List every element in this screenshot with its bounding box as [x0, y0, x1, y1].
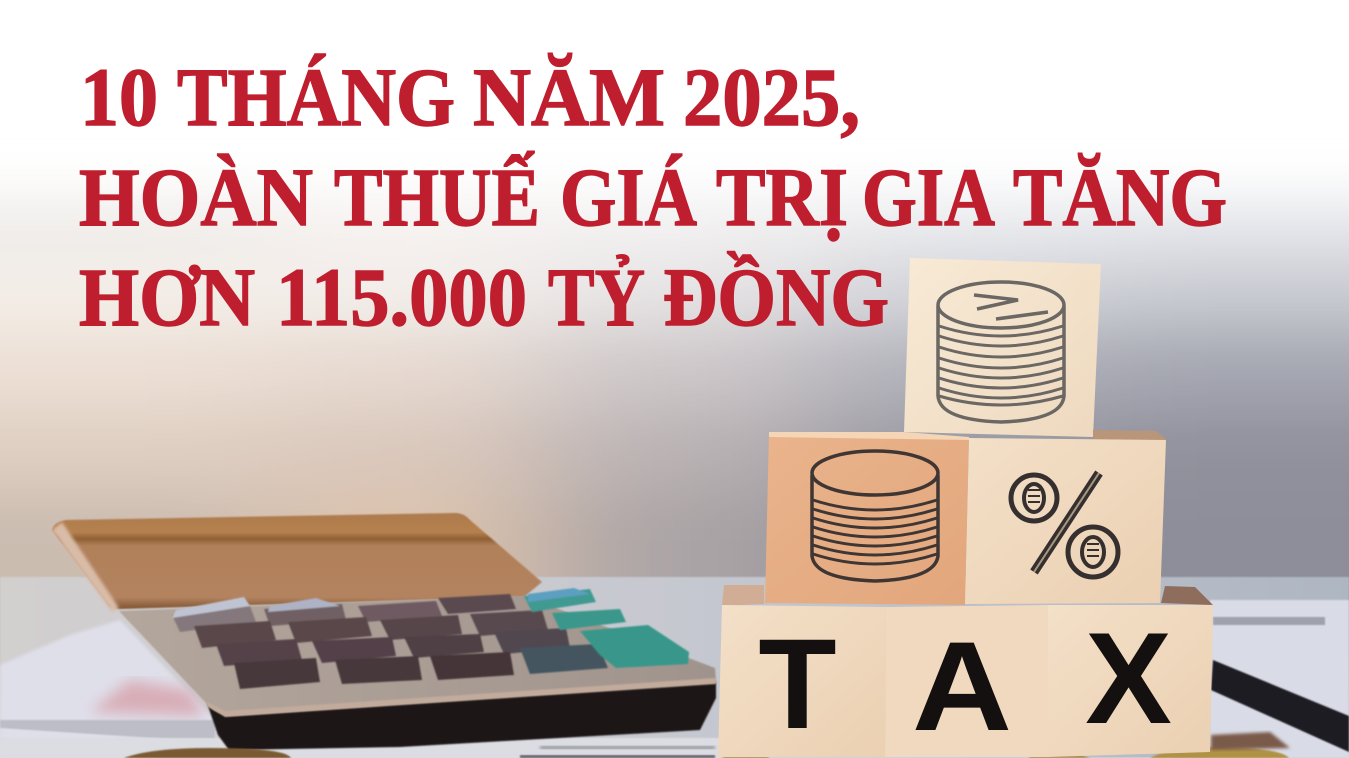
title line 3: ĐỒNG: [663, 251, 889, 343]
coins on the table: [124, 747, 1289, 758]
title line 2: GIA: [862, 151, 995, 243]
title line 3: TỶ: [548, 251, 645, 343]
letter A: A: [912, 615, 1012, 757]
title: [79, 51, 1227, 343]
title line 3: 115.000: [276, 251, 527, 343]
title line 2: TRỊ: [716, 151, 848, 243]
block top edge behind percent: [1093, 430, 1167, 440]
pen: [1211, 660, 1349, 752]
bottom block: X: [1048, 605, 1213, 757]
title line 1: 2025,: [683, 51, 860, 143]
wooden tax blocks: [718, 258, 1213, 757]
calculator body: [119, 596, 716, 714]
calculator display lid: [52, 513, 542, 609]
title line 2: THUẾ: [334, 151, 540, 243]
title line 1: NĂM: [473, 51, 665, 143]
title line 3: HƠN: [79, 251, 255, 343]
title line 2: TĂNG: [1013, 151, 1227, 243]
middle block: percent: [965, 438, 1166, 604]
bottom block: A: [885, 605, 1048, 757]
bottom block: T: [718, 605, 886, 757]
middle block: coins: [765, 432, 969, 605]
title line 3: [79, 251, 889, 343]
calculator keys: [172, 588, 689, 689]
title line 2: HOÀN: [79, 151, 313, 243]
calculator: [52, 513, 716, 750]
letter T: T: [758, 613, 837, 756]
letter X: X: [1085, 605, 1172, 751]
title line 1: THÁNG: [177, 51, 455, 143]
calculator base: [207, 682, 716, 750]
title line 1: [80, 51, 860, 143]
title line 1: 10: [80, 51, 158, 143]
title line 2: GIÁ: [560, 151, 697, 243]
bottom block back edges: [722, 585, 1213, 606]
paper on the right: [1210, 600, 1349, 758]
title line 2: [79, 151, 1227, 243]
paper under the calculator: [0, 620, 215, 740]
top block: coins: [904, 258, 1101, 437]
